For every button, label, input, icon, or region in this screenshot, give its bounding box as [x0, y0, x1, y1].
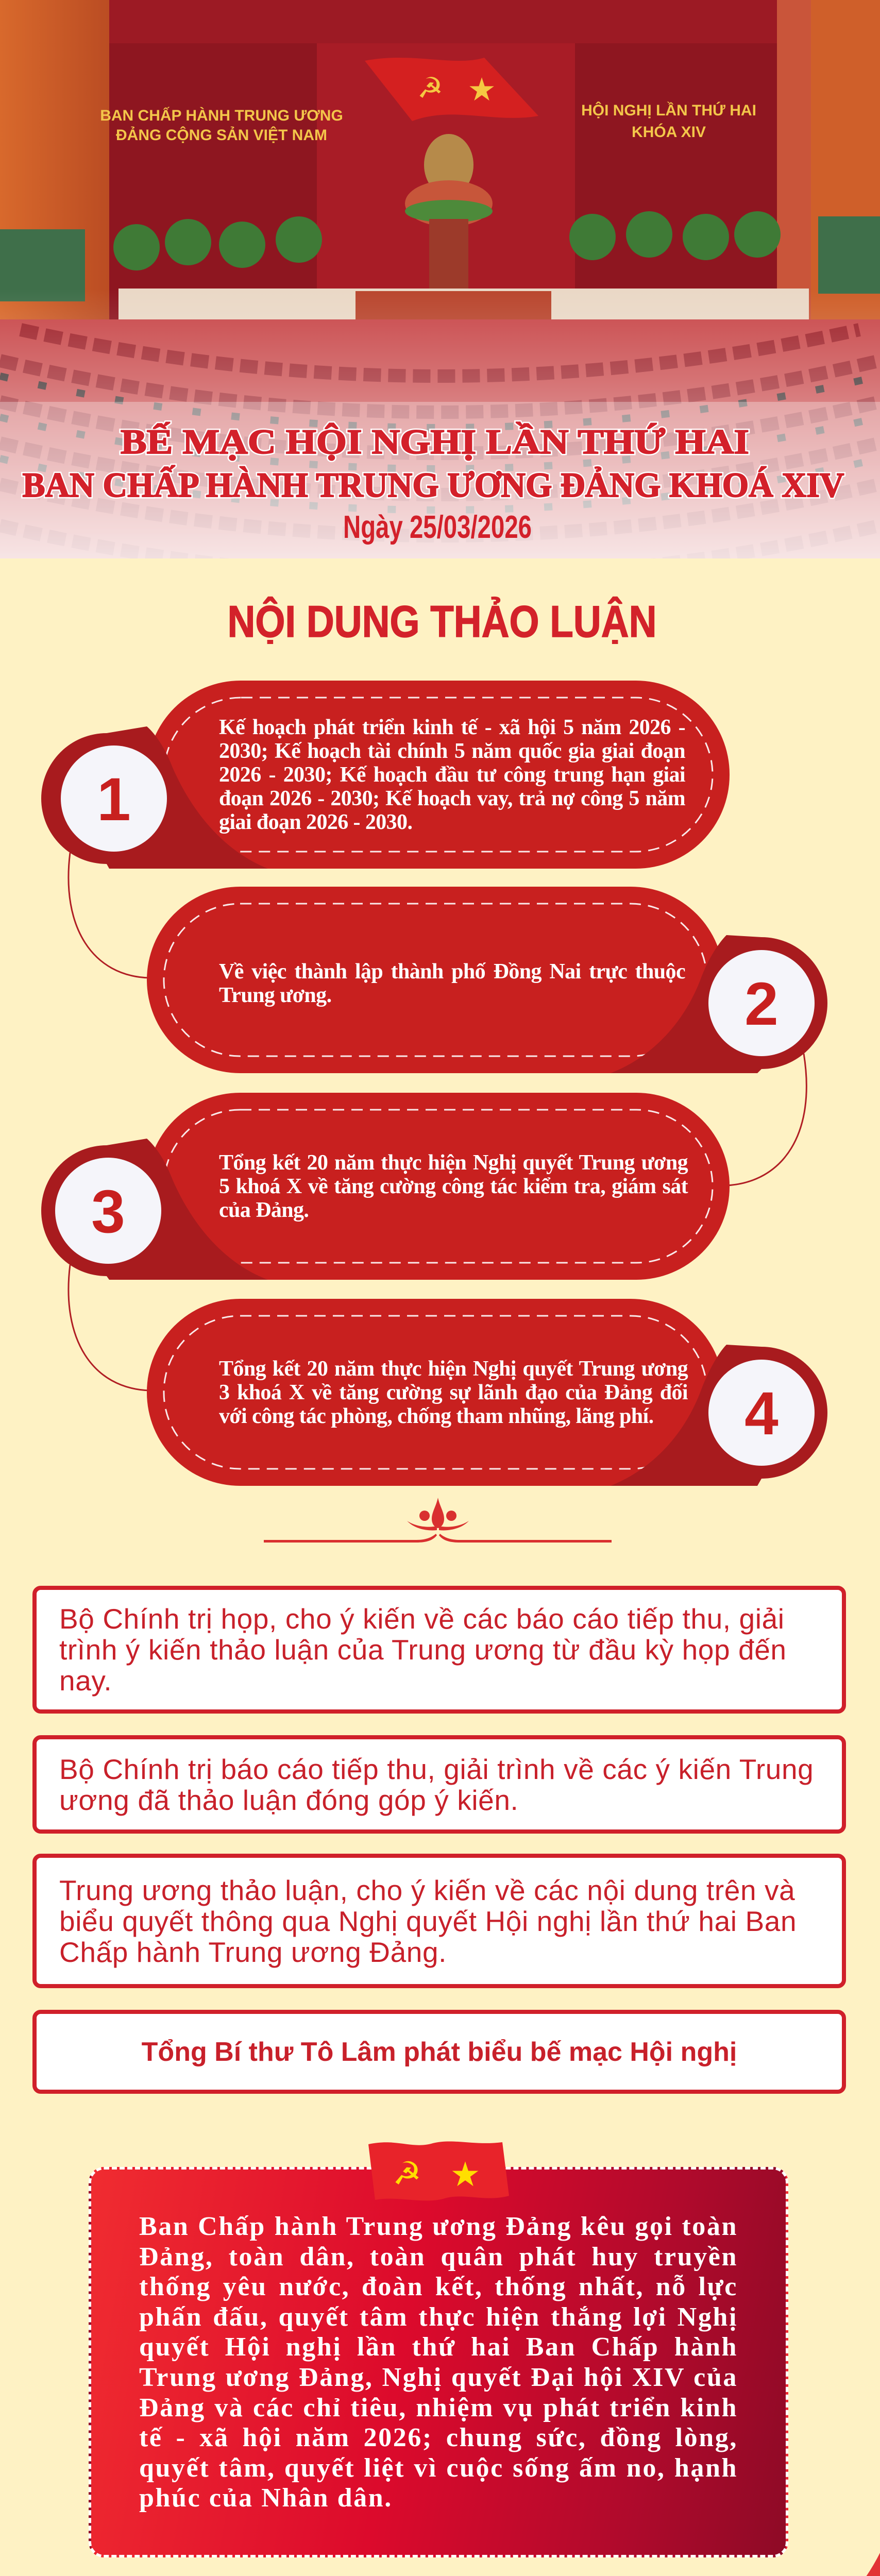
header: conference hall photo with title: KHÓA XIV — [632, 123, 706, 141]
box: closing speech: Tổng Bí thư Tô Lâm phát biểu bế mạc Hội nghị — [142, 2037, 737, 2067]
item 1 text: Kế hoạch phát triển kinh tế - xã hội 5 năm 2026 - 2030; Kế hoạch tài chính 5 năm quốc gia giai đoạn 2026 - 2030; Kế hoạch đầu tư công trung hạn giai đoạn 2026 - 2030; Kế hoạch vay, trả nợ công 5 năm giai đoạn 2026 - 2030. — [219, 715, 685, 834]
item 3 text: Tổng kết 20 năm thực hiện Nghị quyết Trung ương 5 khoá X về tăng cường công tác kiểm tra, giám sát của Đảng. — [219, 1151, 688, 1222]
bottom wave decoration — [867, 2553, 880, 2576]
number circle 3 — [55, 1158, 161, 1264]
header: conference hall photo with title: BAN CHẤP HÀNH TRUNG ƯƠNG — [100, 107, 343, 124]
box: step 3: Trung ương thảo luận, cho ý kiến về các nội dung trên và biểu quyết thông qua Nghị quyết Hội nghị lần thứ hai Ban Chấp hành Trung ương Đảng. — [59, 1874, 797, 1968]
header: conference hall photo with title: ☭ — [417, 72, 443, 105]
box: step 2: Bộ Chính trị báo cáo tiếp thu, giải trình về các ý kiến Trung ương đã thảo luận đóng góp ý kiến. — [59, 1753, 814, 1816]
callout text: Ban Chấp hành Trung ương Đảng kêu gọi toàn Đảng, toàn dân, toàn quân phát huy truyền thống yêu nước, đoàn kết, thống nhất, nỗ lực phấn đấu, quyết tâm thực hiện thắng lợi Nghị quyết Hội nghị lần thứ hai Ban Chấp hành Trung ương Đảng, Nghị quyết Đại hội XIV của Đảng và các chỉ tiêu, nhiệm vụ phát triển kinh tế - xã hội năm 2026; chung sức, đồng lòng, quyết tâm, quyết liệt vì cuộc sống ấm no, hạnh phúc của Nhân dân. — [139, 2212, 738, 2513]
date: Ngày 25/03/2026 — [343, 510, 532, 545]
header: conference hall photo with title: HỘI NGHỊ LẦN THỨ HAI — [581, 101, 756, 119]
item 2 text: Về việc thành lập thành phố Đồng Nai trực thuộc Trung ương. — [219, 960, 685, 1007]
callout: call to action panel — [89, 2167, 788, 2557]
icon: party flag: ☭ — [393, 2155, 421, 2192]
item 4 text: Tổng kết 20 năm thực hiện Nghị quyết Trung ương 3 khoá X về tăng cường sự lãnh đạo của Đảng đối với công tác phòng, chống tham nhũng, lãng phí. — [219, 1357, 688, 1428]
connectors between items — [67, 852, 807, 1391]
item 4 — [147, 1299, 827, 1486]
number circle 3: 3 — [91, 1178, 125, 1246]
number circle 1 — [61, 745, 167, 852]
number circle 2: 2 — [744, 970, 779, 1038]
title: BAN CHẤP HÀNH TRUNG ƯƠNG ĐẢNG KHOÁ XIV — [23, 465, 844, 504]
item 2 — [147, 887, 827, 1073]
number circle 2 — [708, 950, 815, 1056]
header: conference hall photo with title: ĐẢNG CỘNG SẢN VIỆT NAM — [116, 126, 327, 144]
header: conference hall photo with title: BAN CHẤP HÀNH TRUNG ƯƠNG ĐẢNG KHOÁ XIV — [23, 465, 844, 504]
header: conference hall photo with title — [0, 0, 880, 558]
box: step 1 — [32, 1586, 846, 1714]
box: step 2 — [32, 1735, 846, 1834]
box: step 3 — [32, 1854, 846, 1988]
header: conference hall photo with title: BẾ MẠC HỘI NGHỊ LẦN THỨ HAI — [121, 422, 749, 461]
number circle 1: 1 — [97, 766, 131, 834]
title — [23, 422, 844, 504]
item 3 — [41, 1093, 730, 1280]
box: closing speech — [32, 2010, 846, 2094]
title: BẾ MẠC HỘI NGHỊ LẦN THỨ HAI — [121, 422, 749, 461]
number circle 4: 4 — [744, 1380, 779, 1448]
header: conference hall photo with title: ★ — [467, 71, 496, 108]
box: step 1: Bộ Chính trị họp, cho ý kiến về các báo cáo tiếp thu, giải trình ý kiến thảo luận của Trung ương từ đầu kỳ họp đến nay. — [59, 1603, 787, 1697]
ornament divider — [264, 1498, 612, 1543]
number circle 4 — [708, 1360, 815, 1466]
item 1 — [41, 681, 730, 869]
icon: party flag: ★ — [450, 2155, 481, 2194]
icon: party flag — [368, 2141, 509, 2201]
